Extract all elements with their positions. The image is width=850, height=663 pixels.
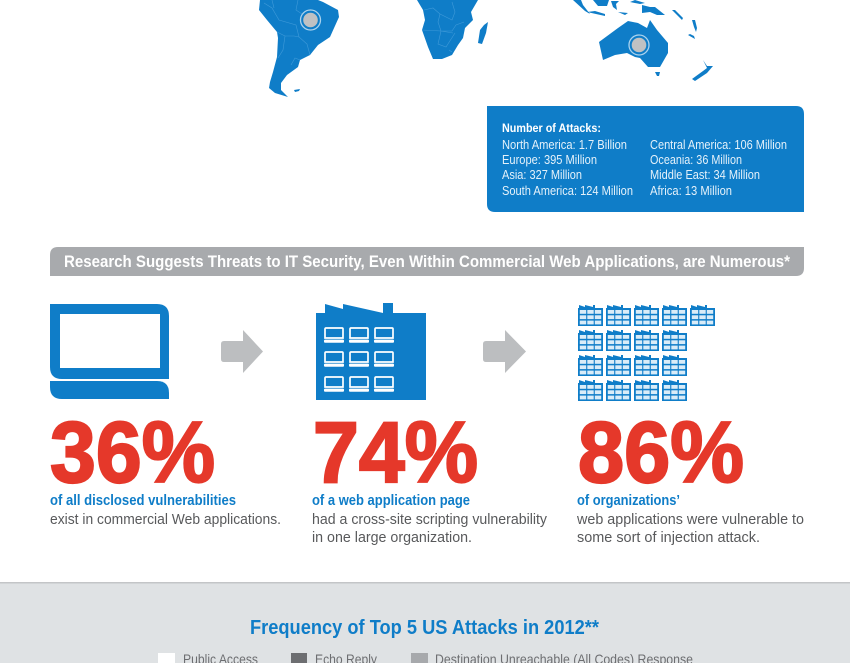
- attack counts by region: Middle East: 34 Million: [650, 168, 760, 182]
- section banner: Research Suggests Threats to IT Security, Even Within Commercial Web Applications, are Numerous*: [64, 253, 791, 271]
- stat: 74%: [312, 405, 547, 546]
- icon: laptop: [50, 304, 169, 399]
- stat text: 74%: of a web application page: [312, 492, 470, 509]
- stat text: 36%: of all disclosed vulnerabilities: [50, 492, 236, 509]
- stat text: 86%: of organizations’: [577, 492, 680, 509]
- stat text: 86%: web applications were vulnerable to: [576, 511, 804, 528]
- panel: number of attacks: [487, 106, 804, 212]
- attack counts by region: South America: 124 Million: [502, 184, 633, 198]
- icon: grid of buildings: [578, 305, 715, 401]
- icon: building with laptops: [316, 303, 426, 400]
- map: South America: [259, 0, 339, 97]
- marker: Australia: [629, 35, 649, 55]
- attack counts by region: North America: 1.7 Billion: [502, 138, 627, 152]
- arrow: building to many buildings: [483, 330, 526, 373]
- map: Tasmania: [655, 72, 660, 76]
- map: Australia: [599, 20, 668, 67]
- attack counts by region: Oceania: 36 Million: [650, 153, 742, 167]
- stat: 74%: 74%: [313, 405, 478, 501]
- stat text: 86%: [576, 492, 804, 546]
- attack counts by region: Central America: 106 Million: [650, 138, 787, 152]
- map: Indonesia and Pacific islands: [573, 0, 697, 39]
- world map: [259, 0, 713, 97]
- stat text: 86%: some sort of injection attack.: [577, 529, 760, 546]
- stat text: 36%: exist in commercial Web applications.: [50, 511, 281, 528]
- arrow: laptop to building: [221, 330, 263, 373]
- map: Madagascar: [478, 22, 488, 44]
- map: Falkland Islands: [294, 89, 300, 92]
- panel: frequency of top 5 US attacks: [0, 582, 850, 663]
- section banner: [50, 247, 804, 276]
- stat text: 74%: had a cross-site scripting vulnerability: [312, 511, 547, 528]
- stat text: 36%: [50, 492, 281, 528]
- stat: 86%: 86%: [578, 405, 744, 501]
- attack counts by region: [502, 138, 787, 198]
- legend: [158, 651, 693, 663]
- stat: 36%: [50, 405, 281, 528]
- stat text: 74%: [312, 492, 547, 546]
- heading: frequency of top 5 US attacks: Frequency of Top 5 US Attacks in 2012**: [250, 617, 599, 639]
- marker: South America: [300, 10, 320, 30]
- stat text: 74%: in one large organization.: [312, 529, 472, 546]
- map: Africa: [417, 0, 478, 59]
- stat: 36%: 36%: [50, 405, 215, 501]
- attack counts by region: Asia: 327 Million: [502, 168, 582, 182]
- attack counts by region: Europe: 395 Million: [502, 153, 597, 167]
- stat: 86%: [576, 405, 804, 546]
- attack counts by region: Africa: 13 Million: [650, 184, 732, 198]
- map: New Zealand: [692, 60, 713, 81]
- heading: number of attacks: Number of Attacks:: [502, 121, 601, 135]
